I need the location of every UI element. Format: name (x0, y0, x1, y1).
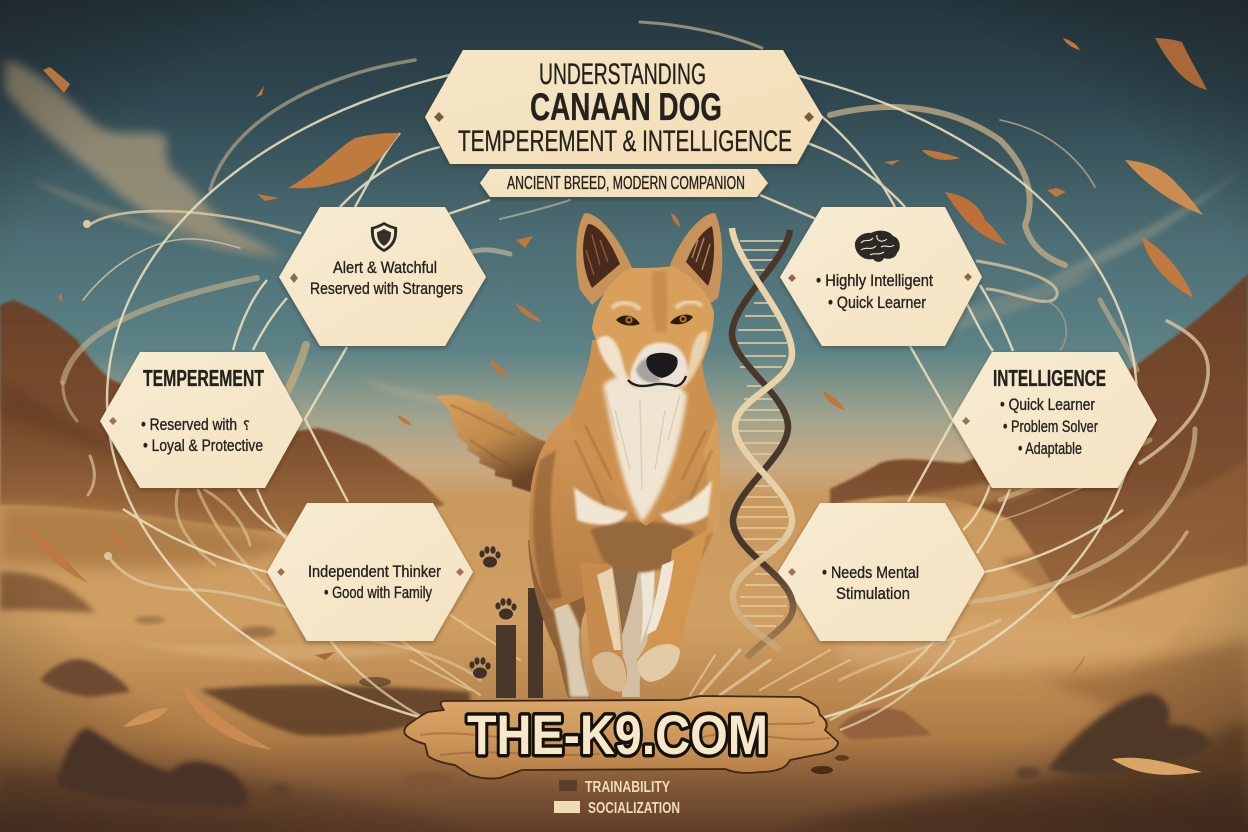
mouth (628, 376, 686, 386)
panel: highly intelligent: • Highly Intelligent (816, 271, 933, 290)
panel: needs mental stimulation: • Needs Mental (822, 563, 919, 582)
panel: temperement (100, 352, 303, 488)
cheeks and muzzle (597, 336, 634, 392)
panel: intelligence: INTELLIGENCE (993, 365, 1106, 391)
panel: main title: TEMPEREMENT & INTELLIGENCE (458, 125, 792, 158)
legend swatch: socialization (554, 801, 580, 813)
panel: subtitle ribbon (480, 169, 768, 197)
legend swatch: trainability (559, 780, 577, 791)
neck (568, 340, 717, 526)
panel: alert and watchful: Reserved with Strangers (310, 279, 463, 298)
icon: DNA helix (732, 228, 793, 658)
chest fur (603, 374, 687, 522)
panel: needs mental stimulation (778, 503, 985, 641)
brow markings (612, 302, 702, 310)
dark ground shadow band (200, 685, 470, 736)
panel: needs mental stimulation: Stimulation (836, 584, 910, 603)
panel: highly intelligent: • Quick Learner (828, 293, 926, 312)
belly fur (590, 521, 695, 572)
panel: intelligence: • Problem Solver (1003, 417, 1098, 436)
panel: independent thinker (267, 503, 473, 641)
panel: alert and watchful (279, 207, 486, 346)
panel: temperement: ⸮ (243, 418, 250, 433)
panel: main title: UNDERSTANDING (539, 58, 706, 91)
far hind leg (612, 560, 655, 697)
panel: temperement: • Loyal & Protective (143, 436, 263, 455)
panel: intelligence (952, 352, 1157, 488)
front right raised leg (637, 530, 707, 682)
dog illustration (435, 213, 722, 698)
panel: main title: CANAAN DOG (530, 86, 722, 129)
rocks (40, 616, 1210, 808)
panel: independent thinker: Independent Thinker (308, 562, 441, 581)
sign: the-k9.com wooden plank: THE-K9.COM (467, 703, 768, 766)
panel: temperement: TEMPEREMENT (143, 365, 264, 391)
panel: intelligence: • Quick Learner (1000, 395, 1095, 414)
nose (646, 353, 678, 378)
legend (554, 779, 680, 817)
panel: temperement: • Reserved with (141, 415, 237, 434)
icon: brain (855, 231, 900, 262)
bar chart with paw prints (469, 546, 543, 698)
swirling ribbons (63, 22, 1208, 680)
front raised leg (580, 562, 627, 692)
sign: the-k9.com wooden plank (404, 696, 849, 779)
panel: main title (425, 50, 823, 164)
icon: shield (371, 222, 397, 252)
eyes (616, 315, 693, 326)
panel: intelligence: • Adaptable (1018, 439, 1082, 458)
legend: SOCIALIZATION (588, 800, 680, 817)
title diamond left (434, 112, 444, 122)
tail (435, 395, 550, 492)
frame lines connecting the panels (107, 55, 1137, 745)
icon: paw middle (495, 598, 517, 620)
ear left (576, 213, 632, 305)
ground rays around the paws (400, 615, 850, 695)
panel: alert and watchful: Alert & Watchful (333, 258, 437, 277)
torso (529, 395, 720, 610)
icon: paw bottom (469, 657, 491, 678)
legend: TRAINABILITY (585, 779, 670, 796)
head (592, 266, 714, 392)
panel: highly intelligent (780, 207, 982, 346)
ear right (670, 213, 722, 305)
icon: paw top (479, 546, 501, 568)
rear leg (528, 540, 600, 698)
panel: subtitle ribbon: ANCIENT BREED, MODERN COMPANION (507, 173, 745, 193)
panel: independent thinker: • Good with Family (324, 583, 432, 602)
